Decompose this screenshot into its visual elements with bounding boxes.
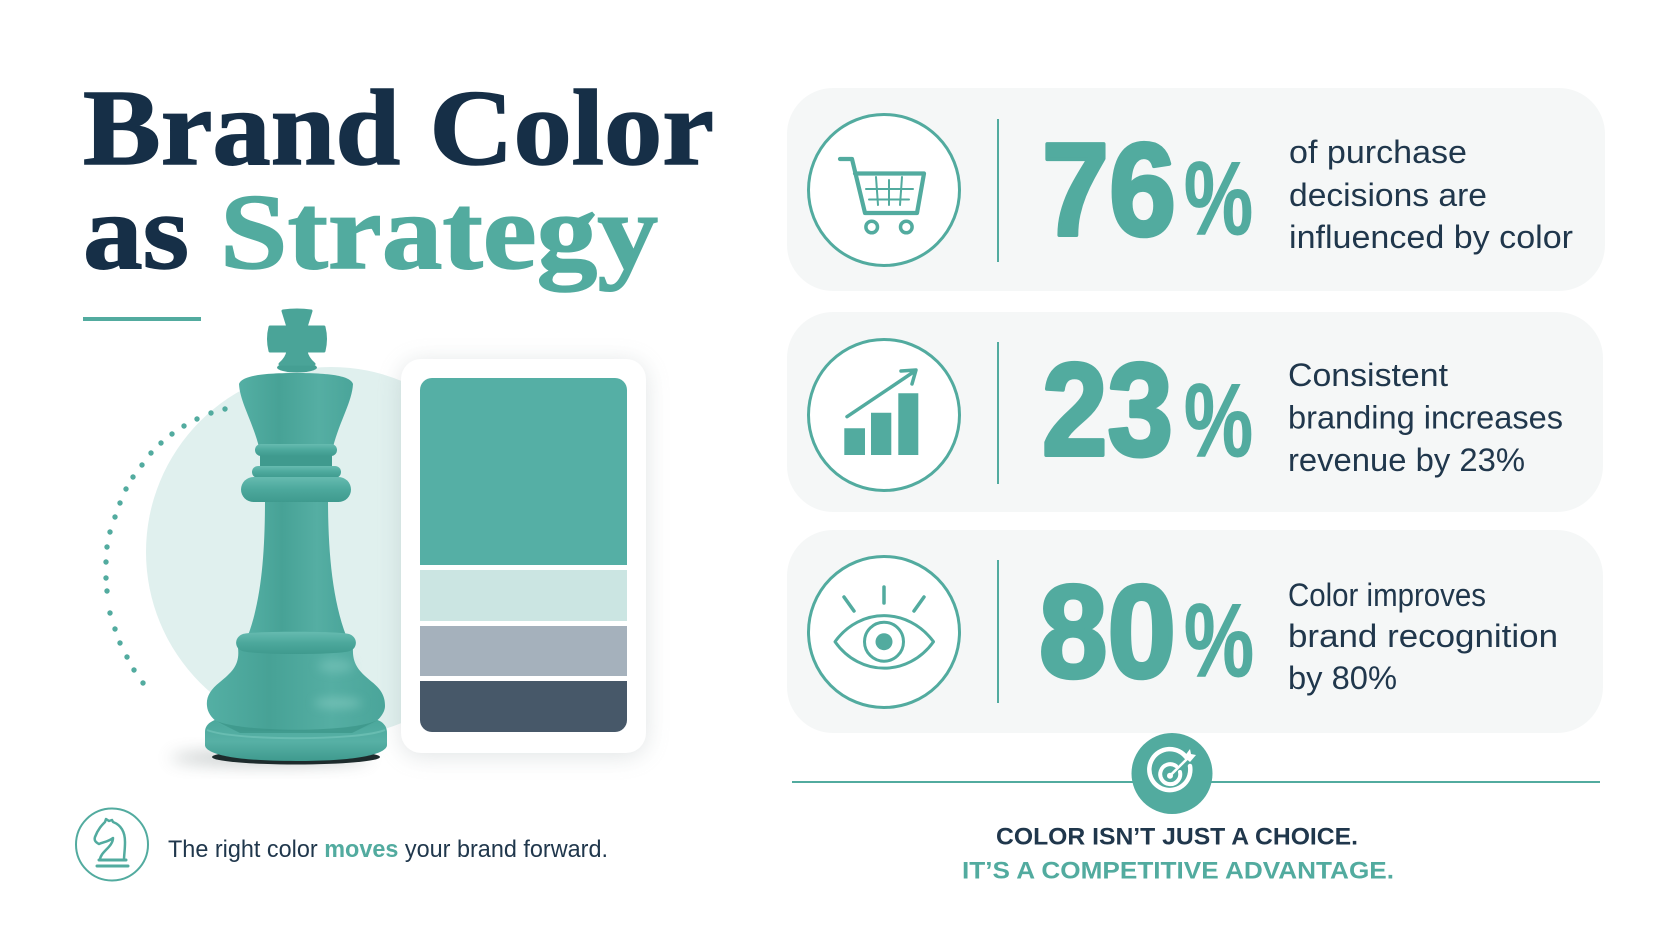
title underline bbox=[83, 317, 201, 321]
stat 80%: 80 bbox=[1039, 558, 1176, 705]
description: of purchase bbox=[1289, 134, 1467, 170]
title bbox=[83, 69, 714, 292]
closing statement: IT’S A COMPETITIVE ADVANTAGE. bbox=[962, 858, 1394, 884]
description bbox=[1289, 134, 1573, 255]
panel: 80% recognition bbox=[787, 530, 1603, 733]
background circle bbox=[146, 367, 516, 737]
divider bbox=[997, 560, 999, 703]
icon: target bbox=[1132, 733, 1212, 814]
palette card bbox=[401, 359, 646, 756]
title: Strategy bbox=[220, 173, 658, 292]
description: by 80% bbox=[1288, 660, 1397, 696]
closing divider line bbox=[792, 781, 1600, 783]
stat 23% bbox=[1042, 336, 1253, 483]
illustration: chess king with palette bbox=[103, 310, 646, 765]
icon: eye bbox=[808, 556, 960, 708]
description bbox=[1288, 357, 1563, 478]
footer tagline bbox=[76, 808, 608, 880]
stat 23%: % bbox=[1184, 363, 1253, 479]
panel: 76% purchase decisions bbox=[787, 88, 1605, 291]
panel: 23% revenue bbox=[787, 312, 1603, 512]
dotted arc bbox=[103, 406, 228, 686]
description: revenue by 23% bbox=[1288, 442, 1525, 478]
description: Color improves bbox=[1288, 577, 1486, 613]
closing statement: COLOR ISN’T JUST A CHOICE. bbox=[996, 824, 1358, 850]
icon: knight bbox=[76, 808, 148, 880]
title: Brand Color bbox=[83, 69, 714, 188]
stat 23%: 23 bbox=[1042, 336, 1173, 483]
stat 76%: % bbox=[1184, 141, 1253, 257]
title: as bbox=[83, 173, 189, 292]
chess king bbox=[170, 310, 387, 765]
stat 80%: % bbox=[1184, 583, 1254, 699]
icon: shopping cart bbox=[808, 114, 960, 266]
stat 76%: 76 bbox=[1042, 116, 1176, 263]
description bbox=[1288, 577, 1558, 696]
description: branding increases bbox=[1288, 400, 1563, 436]
closing statement bbox=[962, 824, 1394, 884]
divider bbox=[997, 342, 999, 484]
icon: growth chart bbox=[808, 340, 960, 490]
tagline text: The right color moves your brand forward. bbox=[168, 836, 608, 863]
stat 80% bbox=[1039, 558, 1254, 705]
description: influenced by color bbox=[1289, 219, 1573, 255]
description: decisions are bbox=[1289, 177, 1487, 213]
description: brand recognition bbox=[1288, 618, 1558, 654]
divider bbox=[997, 119, 999, 262]
description: Consistent bbox=[1288, 357, 1448, 393]
stat 76% bbox=[1042, 116, 1253, 263]
